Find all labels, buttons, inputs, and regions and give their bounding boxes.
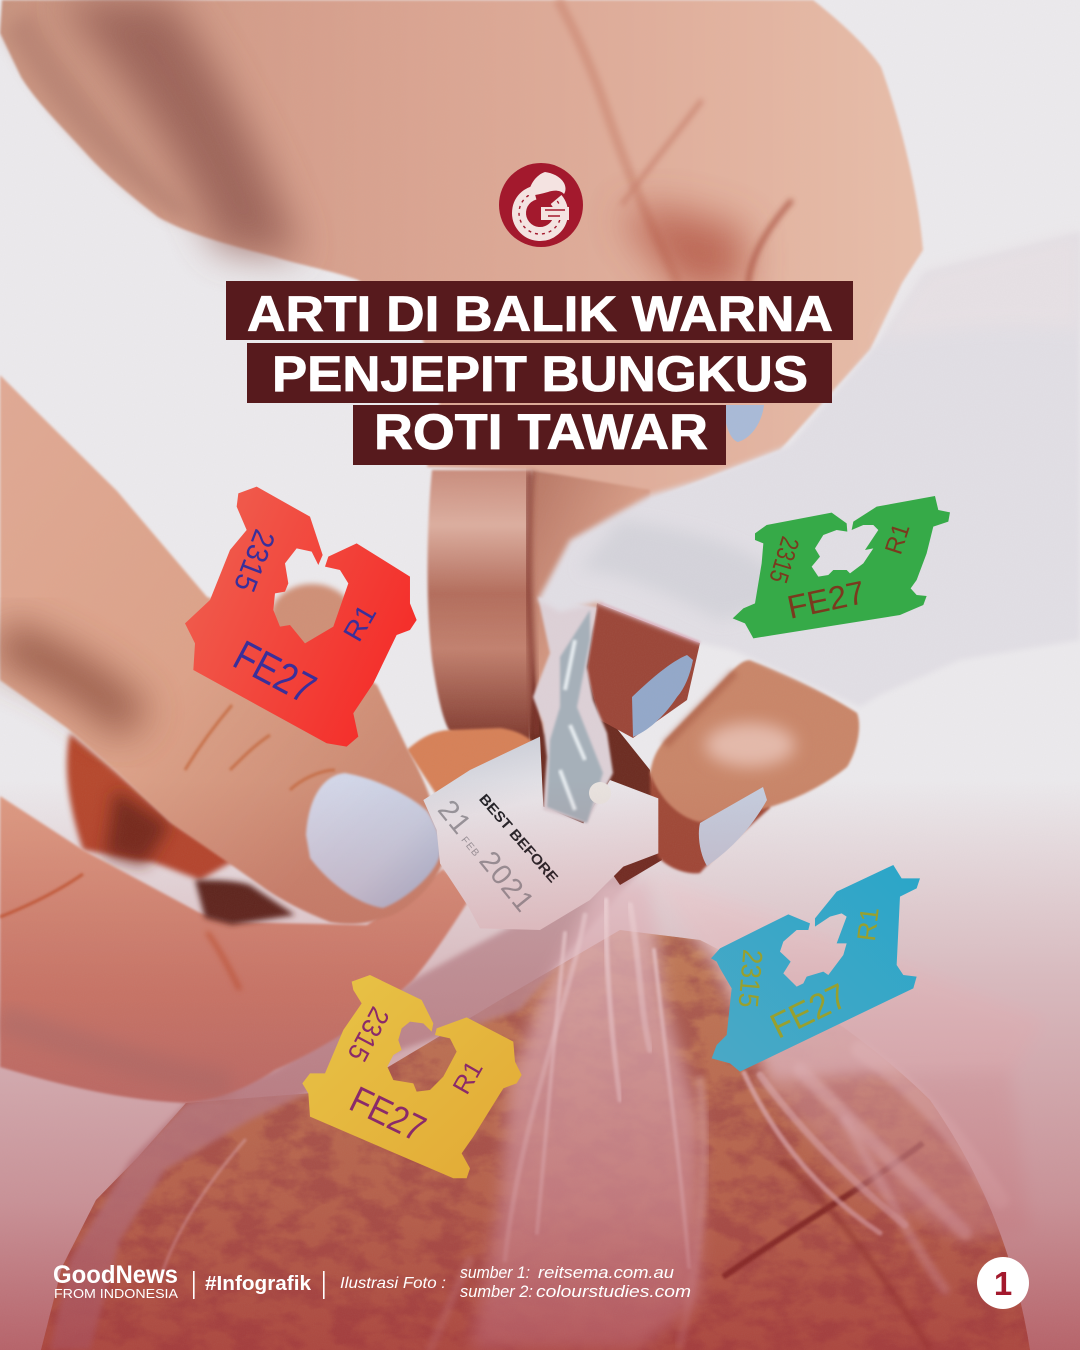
title line 1: ARTI DI BALIK WARNA (247, 286, 833, 342)
hand shading: finger fold (558, 0, 678, 283)
plastic: centre drape (470, 880, 700, 1350)
clip text: best before: BEST BEFORE (475, 791, 561, 886)
hand shading: back of hand (60, 0, 300, 255)
photo: white bread clip with date (423, 737, 658, 930)
photo: loaf of bread (40, 920, 1040, 1350)
footer source 2: sumber 2: (460, 1283, 533, 1301)
title line 2: PENJEPIT BUNGKUS (272, 346, 808, 402)
logo: Garuda emblem (499, 163, 583, 247)
footer brand: from Indonesia: FROM INDONESIA (54, 1287, 179, 1301)
finger: rear left (427, 470, 535, 745)
bread clip: green (733, 496, 950, 638)
finger: centre dark (587, 603, 700, 738)
nail: thumb (306, 773, 440, 908)
bread clip: blue (711, 865, 920, 1072)
green clip code: FE27: FE27 (784, 573, 868, 626)
hand: lower fingers (0, 796, 467, 1103)
colour fade over photo (0, 780, 1080, 1350)
yellow clip code: FE27: FE27 (344, 1078, 432, 1150)
footer divider (193, 1271, 195, 1299)
finger: right (650, 660, 859, 822)
hand: shadow under thumb (195, 880, 295, 925)
green clip code: 2315: 2315 (763, 533, 806, 587)
shadow gap between fingers (525, 600, 662, 885)
title line 3: ROTI TAWAR (374, 404, 708, 460)
footer brand: GoodNews: GoodNews (53, 1261, 178, 1289)
footer photo credit label: Ilustrasi Foto : (340, 1275, 446, 1292)
green clip code: R1: R1 (880, 520, 916, 558)
bread clip: yellow (302, 975, 522, 1178)
photo: clear plastic folds (50, 870, 1045, 1350)
blue clip code: 2315: 2315 (732, 948, 768, 1009)
yellow clip code: R1: R1 (448, 1056, 489, 1099)
red clip code: 2315: 2315 (227, 525, 281, 596)
clip text: date: 21 FEB 2021 (431, 794, 540, 918)
finger shadow band (0, 640, 135, 725)
blue clip code: FE27: FE27 (765, 976, 854, 1046)
finger: index and thumb (0, 375, 443, 924)
bead on twist (589, 782, 611, 804)
footer divider (323, 1271, 325, 1299)
footer source 1: sumber 1: (460, 1264, 530, 1282)
nail: centre finger (632, 655, 693, 737)
finger: lower dark tip (650, 760, 770, 873)
yellow clip code: 2315: 2315 (342, 1002, 396, 1067)
blue clip code: R1: R1 (851, 905, 885, 943)
knuckle behind red clip (270, 584, 354, 652)
page number badge: 1 (994, 1265, 1012, 1302)
footer (53, 1261, 691, 1301)
footer source 2 url: colourstudies.com (536, 1282, 691, 1301)
bread clip: red (185, 487, 417, 747)
photo: plastic bag upper right (538, 232, 1080, 707)
finger: rear right (529, 470, 650, 735)
plastic: right drape (650, 875, 1045, 1085)
footer source 1 url: reitsema.com.au (538, 1263, 675, 1282)
page number badge (977, 1257, 1029, 1309)
photo: lower fingers (427, 470, 859, 885)
footer hashtag: #Infografik (205, 1273, 312, 1295)
red clip code: R1: R1 (337, 599, 382, 647)
nail: upper finger (723, 405, 764, 442)
plastic: lower right veil (760, 1070, 1030, 1240)
finger creases (185, 705, 335, 790)
plastic: left drape (50, 870, 640, 1350)
title block (226, 281, 853, 465)
red clip code: FE27: FE27 (226, 631, 323, 714)
photo: left hand (0, 375, 533, 1103)
plastic: streaks (160, 900, 1000, 1350)
finger: thumb behind clip (407, 728, 533, 800)
finger: rear dark (67, 733, 235, 880)
nail: right finger (699, 787, 767, 866)
photo: upper hand (0, 0, 923, 500)
photo: twisted bag neck (533, 597, 613, 823)
